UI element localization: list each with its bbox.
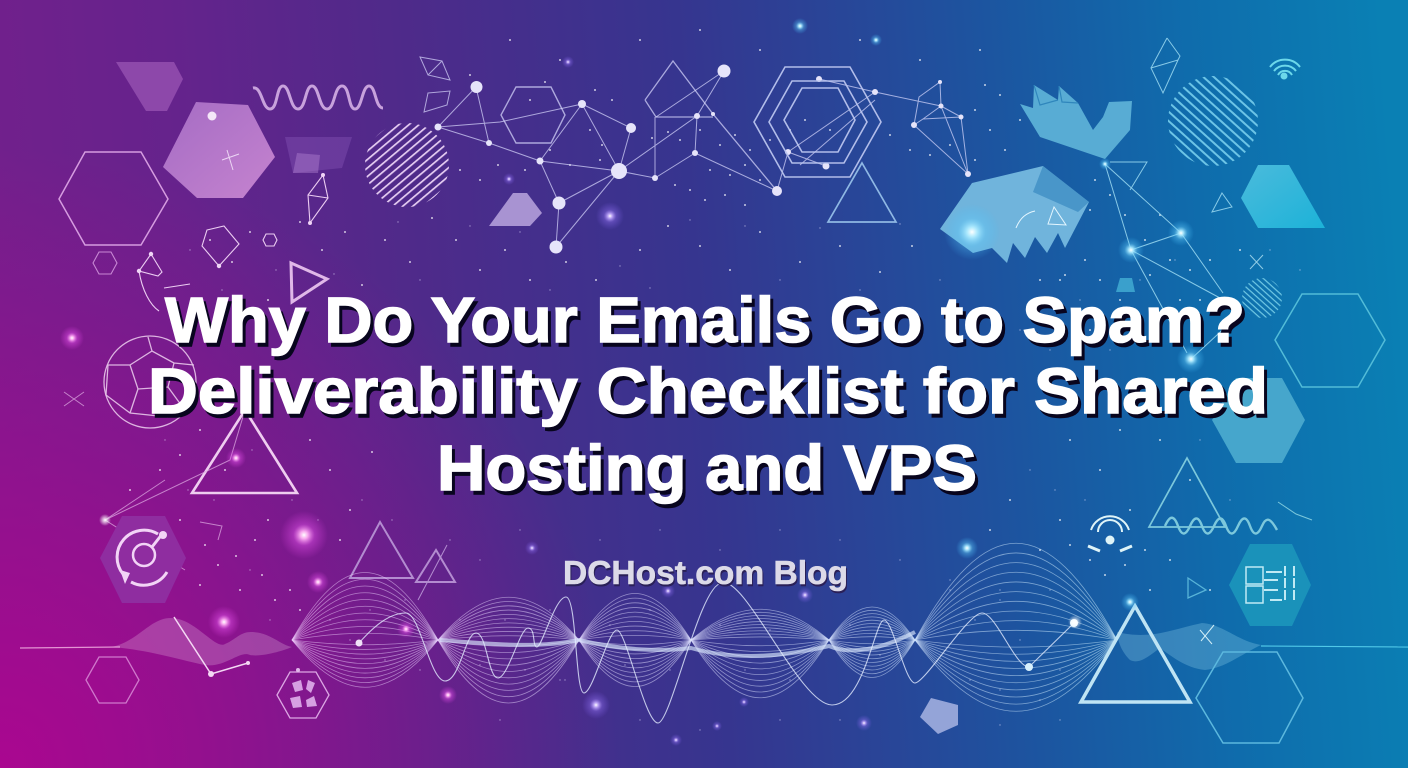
striped small circle right: [1242, 278, 1282, 318]
right ribbon wave: [1117, 623, 1408, 670]
title: [148, 284, 1268, 504]
background magenta corner: [0, 0, 700, 768]
triangle and squiggle right: [1149, 458, 1312, 534]
small constellation top right: [1105, 38, 1263, 359]
title line 3: Hosting and VPS: [437, 432, 977, 504]
small triangle right: [1188, 578, 1206, 598]
squiggle wave top-left: [253, 86, 383, 109]
icon: broadcast: [1088, 516, 1132, 551]
lines and cross left: [64, 392, 245, 570]
striped circle left: [365, 123, 449, 207]
title line 1: Why Do Your Emails Go to Spam?: [165, 284, 1245, 356]
icon: wifi top right: [1270, 60, 1300, 80]
outline hexagon bottom right: [1196, 652, 1303, 743]
title line 2: Deliverability Checklist for Shared: [148, 355, 1268, 427]
triangle bottom right: [1081, 606, 1190, 702]
shape: filled hexagon right: [1212, 378, 1305, 463]
central bright ribbon: [440, 632, 915, 656]
filled small polygon centre-top: [489, 193, 542, 226]
left ribbon wave: [20, 617, 292, 677]
crystalline shape centre right: [940, 166, 1089, 263]
shape: filled hexagon top-left: [163, 102, 275, 198]
glowing nodes: [60, 18, 1205, 746]
filled polygon bottom: [920, 698, 958, 734]
shape: icon hexagon lower left: [100, 516, 186, 603]
shape: outline hexagon left: [59, 152, 168, 245]
shape: top-left filled polygon: [116, 62, 183, 111]
outline triangle top centre-right: [828, 163, 896, 222]
waveform ribbon: [292, 543, 1117, 711]
triangles lower left-centre: [350, 522, 455, 600]
star field: [130, 30, 1300, 730]
shape: cyan polygon right: [1241, 165, 1325, 228]
subtitle: DCHost.com Blog: [563, 554, 848, 591]
shape: outline hexagon right: [1275, 294, 1385, 387]
concentric hexagons: [754, 67, 881, 177]
crystalline shape top right: [1020, 85, 1132, 159]
small trapezoid: [1116, 278, 1135, 292]
constellation network top: [420, 57, 971, 254]
triangle left: [192, 410, 297, 493]
hazy polygon: [285, 137, 352, 173]
patterned hexagon bottom: [277, 668, 329, 718]
striped circle right: [1168, 76, 1258, 166]
polyhedron sphere left: [104, 336, 196, 428]
outline hexagon bottom left: [86, 657, 139, 703]
outline small triangle: [291, 263, 327, 302]
small constellations left: [93, 173, 328, 311]
shape: icon hexagon lower right: [1229, 544, 1311, 626]
meandering thin line: [356, 583, 1078, 723]
